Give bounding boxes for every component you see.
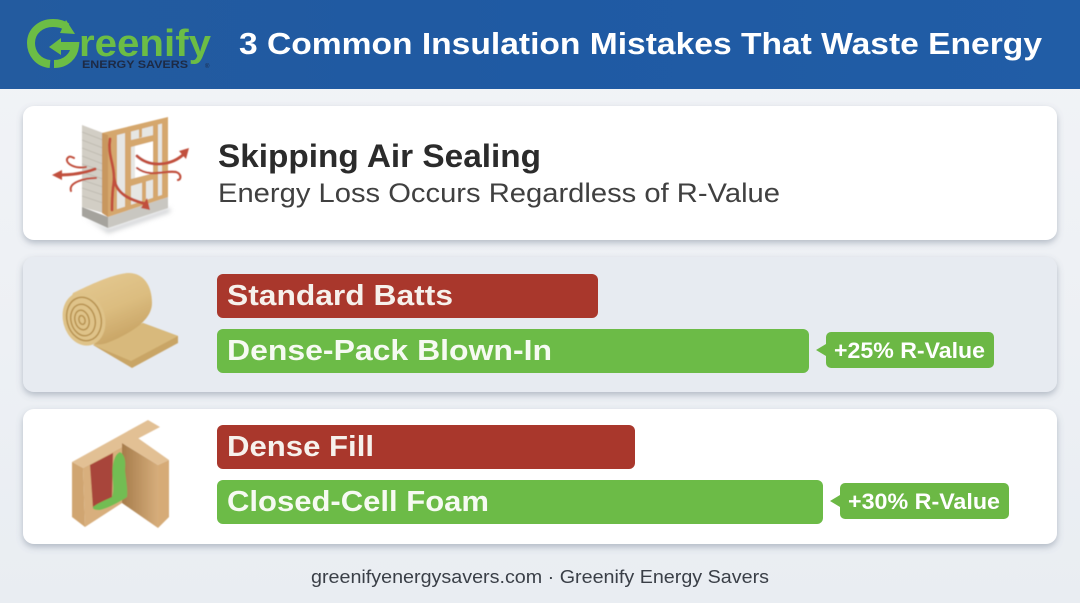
logo: Greenify Energy Savers bbox=[31, 20, 211, 71]
green foam bbox=[93, 452, 127, 510]
panel: batts vs dense-pack bbox=[23, 257, 1057, 392]
red bar: standard batts: Standard Batts bbox=[227, 280, 453, 312]
callout: +25% R-Value bbox=[816, 332, 994, 368]
wordmark: reenify bbox=[79, 23, 211, 65]
red insulation bbox=[90, 453, 113, 508]
icon: wall framing with air leaks bbox=[52, 117, 189, 233]
title: 3 Common Insulation Mistakes That Waste Energy bbox=[239, 26, 1043, 61]
siding wall bbox=[82, 125, 103, 213]
flat sheet bbox=[93, 323, 178, 368]
red bar: dense fill bbox=[217, 425, 635, 469]
callout: +30% R-Value bbox=[830, 483, 1009, 519]
footer text: greenifyenergysavers.com · Greenify Energy Savers bbox=[311, 567, 769, 587]
red bar: dense fill: Dense Fill bbox=[227, 431, 374, 463]
concrete base bbox=[82, 207, 108, 228]
icon: wood corner with foam seal bbox=[72, 420, 169, 528]
roll body bbox=[65, 273, 152, 344]
back board top edge bbox=[72, 420, 160, 468]
back board side bbox=[72, 462, 85, 527]
panel: skipping air sealing bbox=[23, 106, 1057, 240]
registered mark: ® bbox=[205, 63, 210, 70]
cross board shaded face bbox=[122, 443, 158, 528]
green bar: closed-cell foam bbox=[217, 480, 823, 524]
green bar: closed-cell foam: Closed-Cell Foam bbox=[227, 486, 489, 518]
icon: insulation roll bbox=[57, 273, 178, 368]
panel: dense fill vs closed-cell foam bbox=[23, 409, 1057, 544]
roll end spiral bbox=[57, 287, 111, 351]
shadow bbox=[84, 208, 170, 233]
air leak arrows bbox=[58, 139, 185, 210]
cross board side bbox=[158, 460, 169, 528]
back board front face bbox=[83, 447, 122, 527]
callout: +30% R-Value: +30% R-Value bbox=[848, 489, 1000, 514]
green bar: dense-pack blown-in bbox=[217, 329, 809, 373]
red bar: standard batts bbox=[217, 274, 598, 318]
window bbox=[135, 140, 155, 180]
cross board top bbox=[122, 436, 169, 465]
header banner bbox=[0, 0, 1080, 89]
tagline: ENERGY SAVERS bbox=[82, 59, 188, 71]
callout: +25% R-Value: +25% R-Value bbox=[834, 338, 985, 363]
subheading: Energy Loss Occurs Regardless of R-Value bbox=[218, 178, 780, 208]
green bar: dense-pack blown-in: Dense-Pack Blown-In bbox=[227, 335, 552, 367]
timber studs bbox=[102, 117, 168, 217]
heading: Skipping Air Sealing bbox=[218, 138, 541, 174]
icon: recycling G bbox=[31, 20, 75, 64]
wall cavity bbox=[103, 118, 168, 217]
